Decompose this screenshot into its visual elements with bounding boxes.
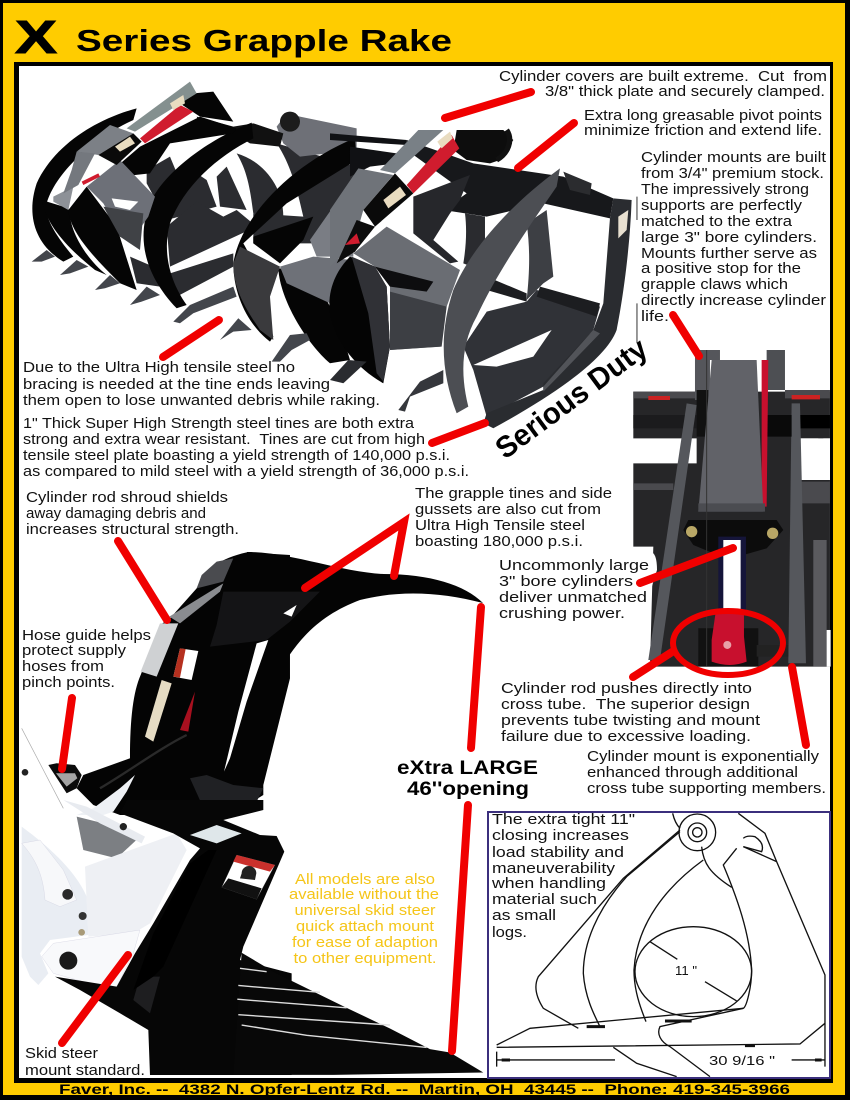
callout: rod shroud: increases structural strength.	[26, 522, 239, 538]
callout: no bracing: bracing is needed at the tine ends leaving	[23, 377, 330, 393]
closing text: closing increases	[492, 828, 629, 844]
callout: cylinder mounts: a positive stop for the	[641, 261, 801, 277]
callout: cylinder rod: Cylinder rod pushes directly into	[501, 681, 752, 697]
callout: bore cylinders	[495, 552, 657, 625]
footer contact line: Faver, Inc. -- 4382 N. Opfer-Lentz Rd. -- Martin, OH 43445 -- Phone: 419-345-3966	[59, 1082, 791, 1097]
closing text	[491, 812, 635, 941]
closing text: material such	[492, 892, 597, 908]
callout: grapple tines: Ultra High Tensile steel	[415, 518, 585, 534]
callout: cylinder mounts: Mounts further serve as	[641, 246, 817, 262]
callout: tines: strong and extra wear resistant. Tines are cut from high	[23, 432, 425, 448]
note: other equipment: quick attach mount	[296, 919, 434, 935]
callout: cylinder mounts: supports are perfectly	[641, 198, 803, 214]
callout: pivot points	[584, 108, 822, 139]
callout: tines: tensile steel plate boasting a yield strength of 140,000 p.s.i.	[23, 448, 450, 464]
closing text: The extra tight 11"	[492, 812, 635, 828]
closing text: when handling	[491, 876, 606, 892]
callout: hose guide: hoses from	[22, 659, 104, 675]
closing text: as small	[492, 908, 556, 924]
callout: grapple tines: gussets are also cut from	[415, 502, 601, 518]
tines	[32, 250, 310, 362]
claws	[32, 92, 357, 363]
callout: rod shroud	[26, 490, 239, 538]
callout: cylinder mounts: matched to the extra	[641, 214, 793, 230]
callout: hose guide	[22, 628, 151, 691]
callout: cylinder mounts: large 3" bore cylinders.	[641, 230, 817, 246]
struts	[648, 403, 806, 663]
callout: skid steer mount	[25, 1046, 145, 1079]
callout: cylinder rod: failure due to excessive loading.	[501, 729, 751, 745]
callout: bore cylinders: crushing power.	[499, 606, 625, 622]
callout: cylinder rod: cross tube. The superior design	[501, 697, 750, 713]
callout: cylinder rod	[501, 681, 760, 745]
photo: cylinder mount close-up	[633, 350, 831, 667]
callout: grapple tines: boasting 180,000 p.s.i.	[415, 534, 583, 550]
callout: tines: 1" Thick Super High Strength steel tines are both extra	[23, 416, 415, 432]
callout: cylinder rod: prevents tube twisting and mount	[501, 713, 760, 729]
lower tine frame	[398, 277, 600, 417]
loader arm and mount plate	[22, 800, 292, 1075]
side plate and blade	[329, 227, 460, 383]
callout: no bracing: Due to the Ultra High tensile steel no	[23, 360, 295, 376]
callout: cylinder mount cross tube	[587, 749, 826, 797]
callout: cylinder covers: 3/8" thick plate and securely clamped.	[545, 84, 825, 100]
dimension labels: 11 "	[675, 963, 697, 978]
callout: skid steer mount: Skid steer	[25, 1046, 98, 1062]
callout: grapple tines	[415, 486, 612, 550]
main claw to tip	[215, 552, 483, 785]
diagram box: closing dimensions: 30 9/16 "	[709, 1053, 775, 1068]
cover and cylinder	[330, 130, 459, 267]
callout: no bracing: them open to lose unwanted debris while raking.	[23, 393, 380, 409]
note: other equipment: All models are also	[295, 872, 435, 888]
tines	[233, 953, 483, 1075]
callout: rod shroud: Cylinder rod shroud shields	[26, 490, 228, 506]
callout: cylinder mounts	[641, 150, 826, 325]
callout: cylinder mounts: Cylinder mounts are built	[641, 150, 826, 166]
callout: no bracing	[23, 360, 380, 409]
heading: extra large opening	[397, 758, 538, 800]
callout: bore cylinders: 3" bore cylinders	[499, 574, 633, 590]
callout: pivot points: minimize friction and extend life.	[584, 123, 822, 139]
plates	[53, 82, 353, 340]
line drawing of grapple	[497, 813, 825, 1077]
arms and gusset	[22, 552, 320, 815]
photo: grapple side view on skid steer	[22, 552, 483, 1075]
callout: grapple tines: The grapple tines and side	[415, 486, 612, 502]
callout: cylinder mount cross tube: Cylinder mount is exponentially	[587, 749, 820, 765]
callout: bore cylinders: Uncommonly large	[499, 558, 649, 574]
cylinder rod	[698, 537, 788, 667]
flange and bolts	[683, 520, 783, 555]
closing text: load stability and	[492, 845, 624, 861]
callout: hose guide: pinch points.	[22, 675, 115, 691]
note: other equipment: available without the	[289, 887, 439, 903]
note: other equipment	[289, 872, 439, 967]
callout: tines: as compared to mild steel with a yield strength of 36,000 p.s.i.	[23, 464, 469, 480]
callout: hose guide: Hose guide helps	[22, 628, 151, 644]
heading: extra large opening: eXtra LARGE	[397, 758, 538, 779]
callout: tines	[23, 416, 469, 480]
closing text: maneuverability	[492, 861, 616, 877]
photo: grapple rake front view, right half	[329, 130, 637, 428]
callout: cylinder mount cross tube: enhanced through additional	[587, 765, 798, 781]
callout: bore cylinders: deliver unmatched	[499, 590, 647, 606]
note: other equipment: for ease of adaption	[292, 935, 438, 951]
callout: cylinder mounts: The impressively strong	[641, 182, 809, 198]
back beam	[407, 140, 613, 218]
photo: grapple rake front view, left half	[32, 82, 357, 363]
slogan: Serious Duty: Serious Duty	[490, 332, 654, 466]
title: X	[15, 11, 57, 63]
note: other equipment: universal skid steer	[294, 903, 436, 919]
closing text: logs.	[492, 925, 527, 941]
diagram box: closing dimensions	[488, 812, 830, 1078]
callout: cylinder mounts: from 3/4" premium stock.	[641, 166, 824, 182]
callout: cylinder mount cross tube: cross tube supporting members.	[587, 781, 826, 797]
red pointer lines	[62, 92, 806, 1051]
warning decal	[222, 855, 275, 899]
callout: pivot points: Extra long greasable pivot points	[584, 108, 822, 124]
callout: cylinder mounts: grapple claws which	[641, 277, 788, 293]
callout: hose guide: protect supply	[22, 643, 127, 659]
callout: cylinder mounts: life.	[641, 309, 669, 325]
callout: cylinder covers	[499, 69, 827, 100]
callout: cylinder covers: Cylinder covers are built extreme. Cut from	[499, 69, 827, 85]
note: other equipment: to other equipment.	[294, 951, 436, 967]
title	[15, 11, 452, 63]
heading: extra large opening: 46''opening	[407, 779, 529, 800]
title: Series Grapple Rake	[76, 23, 452, 58]
callout: rod shroud: away damaging debris and	[26, 506, 206, 522]
callout: cylinder mounts: directly increase cylinder	[641, 293, 826, 309]
cylinder column	[695, 350, 792, 512]
callout: skid steer mount: mount standard.	[25, 1063, 145, 1079]
grey claw	[444, 168, 560, 413]
